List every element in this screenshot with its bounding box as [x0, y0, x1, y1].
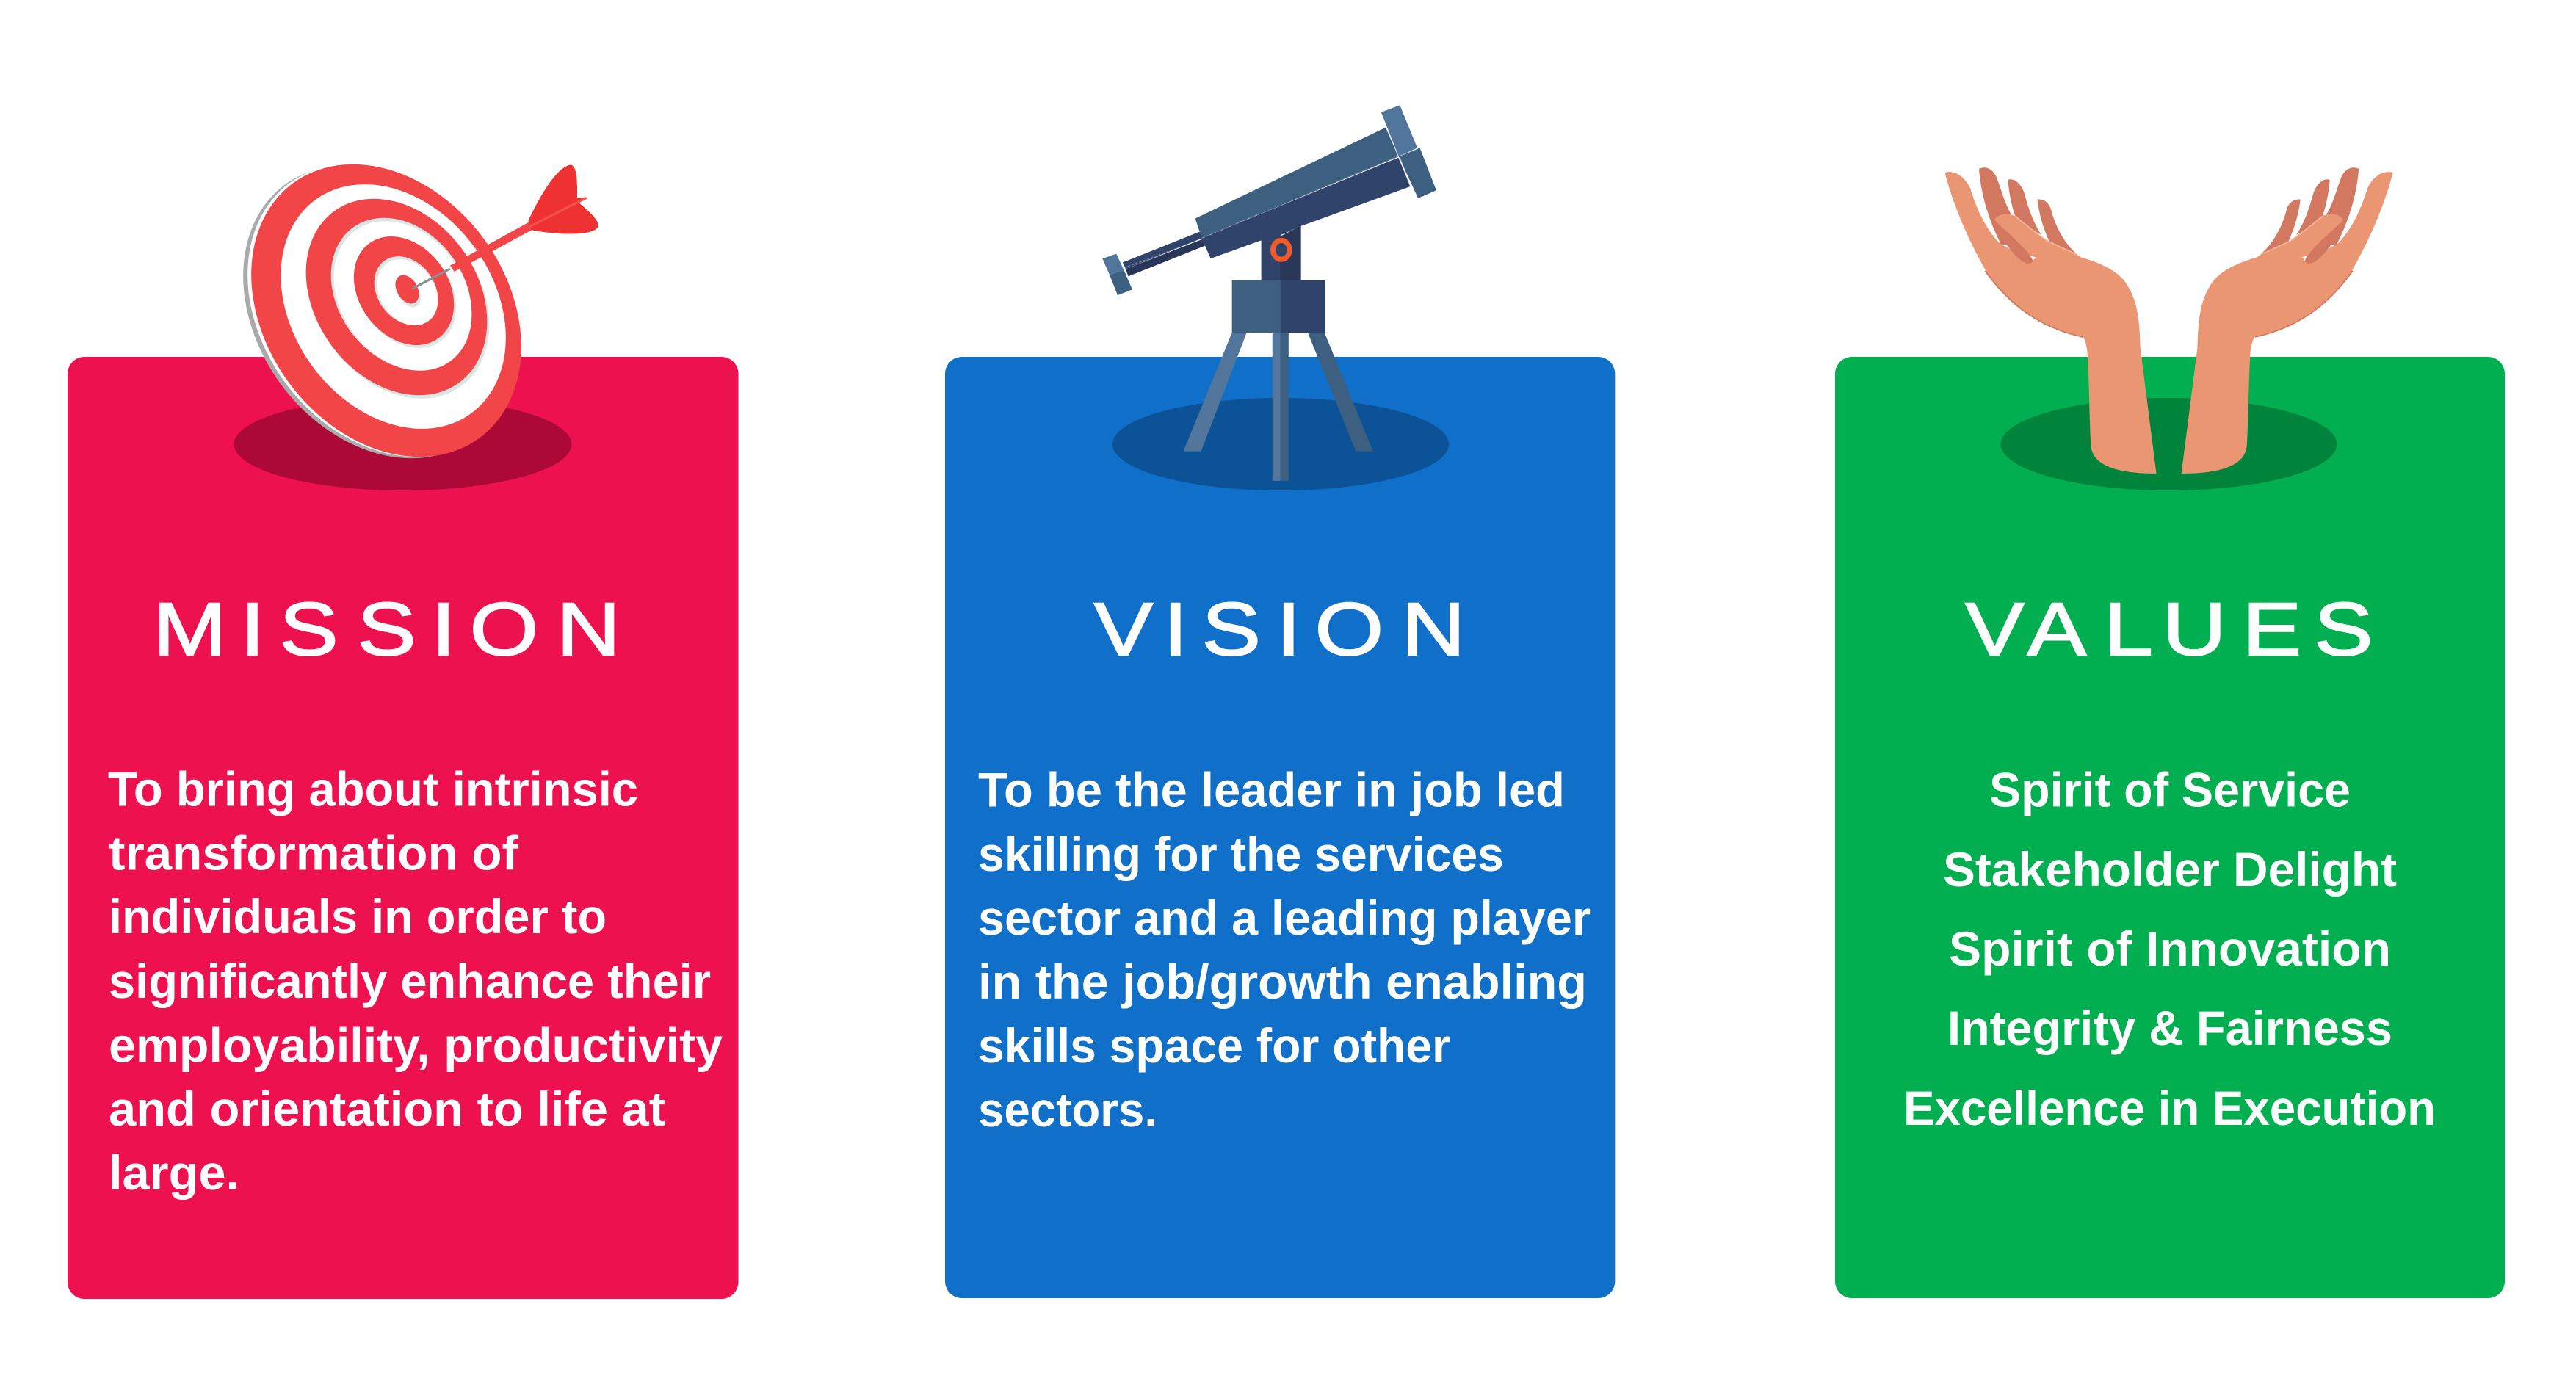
panel: vision [945, 105, 1615, 1298]
mission statement text: individuals in order to [109, 889, 607, 944]
panel: mission [68, 112, 739, 1299]
vision statement text: sector and a leading player [978, 891, 1591, 945]
icon: telescope on tripod [1102, 105, 1436, 481]
vision card background [945, 357, 1615, 1298]
values card background [1835, 357, 2505, 1298]
values list text: Stakeholder Delight [1943, 842, 2397, 897]
values list text: Integrity & Fairness [1947, 1001, 2392, 1055]
mission statement text: To bring about intrinsic [108, 762, 638, 816]
vision statement text: skilling for the services [978, 827, 1504, 881]
mission statement text [108, 762, 723, 1200]
icon: raised open hands [1945, 167, 2393, 474]
mission statement text: significantly enhance their [109, 954, 711, 1008]
vision statement text: in the job/growth enabling [978, 955, 1587, 1009]
left hand [1945, 167, 2157, 474]
vision statement text [978, 763, 1591, 1137]
values icon shadow [2000, 398, 2337, 490]
mission statement text: and orientation to life at [109, 1082, 665, 1136]
heading: VALUES: VALUES [1965, 587, 2373, 671]
values list text: Spirit of Innovation [1949, 921, 2391, 976]
values list text [1903, 763, 2436, 1135]
panel: values [1835, 167, 2505, 1298]
heading: VISION: VISION [1094, 587, 1465, 671]
values list text: Excellence in Execution [1903, 1081, 2436, 1135]
vision icon shadow [1112, 398, 1449, 490]
icon: target with dart [187, 112, 598, 511]
mission statement text: transformation of [109, 825, 519, 880]
heading: MISSION: MISSION [153, 587, 621, 671]
mission statement text: large. [109, 1145, 239, 1200]
vision statement text: To be the leader in job led [978, 763, 1565, 817]
mission card background [68, 357, 739, 1299]
right hand [2182, 167, 2393, 474]
mission statement text: employability, productivity [109, 1018, 723, 1072]
vision statement text: sectors. [978, 1082, 1157, 1137]
vision statement text: skills space for other [978, 1018, 1450, 1073]
mission icon shadow [234, 398, 571, 490]
values list text: Spirit of Service [1989, 763, 2351, 817]
